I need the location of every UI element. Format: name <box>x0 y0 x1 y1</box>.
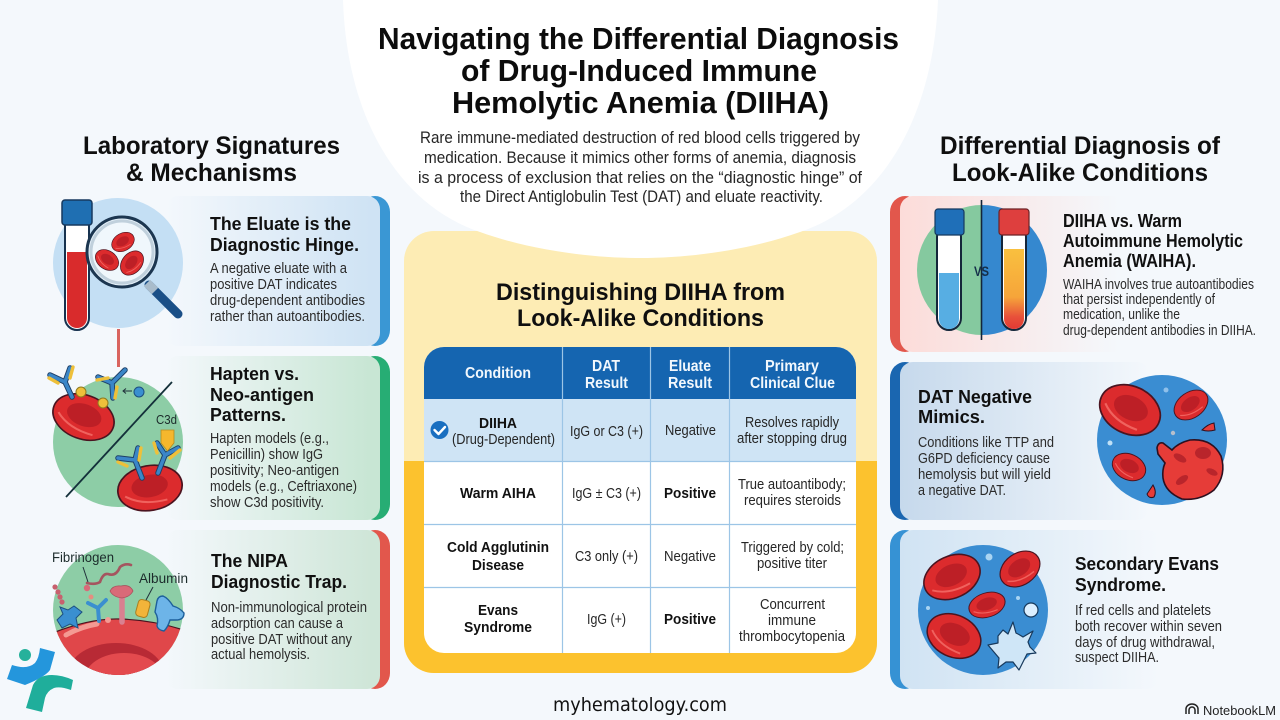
row: Cold Agglutinin Disease: positive titer <box>757 555 827 572</box>
body: NIPA <box>211 600 367 663</box>
heading: eluate: Diagnostic Hinge. <box>210 234 359 255</box>
body: NIPA: Non-immunological protein <box>211 600 367 616</box>
row: Evans Syndrome: thrombocytopenia <box>739 628 845 645</box>
icon: protein adsorption: Albumin <box>139 571 188 586</box>
right column heading <box>940 132 1221 187</box>
row: Warm AIHA: Warm AIHA <box>460 485 536 502</box>
panel: NIPA trap <box>165 530 390 689</box>
body: hapten: models (e.g., Ceftriaxone) <box>210 479 357 495</box>
icon: protein adsorption: Fibrinogen <box>52 550 114 565</box>
icon: two tubes versus <box>917 200 1047 340</box>
body: Evans: both recover within seven <box>1075 619 1222 635</box>
panel: eluate hinge <box>165 196 390 346</box>
row: Cold Agglutinin Disease <box>447 539 844 574</box>
body: WAIHA: that persist independently of <box>1063 292 1215 308</box>
heading: eluate <box>210 213 359 255</box>
table heading: Look-Alike Conditions <box>517 305 764 332</box>
panel: DAT negative mimics <box>890 362 1150 520</box>
heading: NIPA: Diagnostic Trap. <box>211 571 347 592</box>
row: Cold Agglutinin Disease: Disease <box>472 557 524 574</box>
heading: hapten: Hapten vs. <box>210 363 299 384</box>
table heading <box>496 279 785 332</box>
row: Cold Agglutinin Disease: Cold Agglutinin <box>447 539 549 556</box>
body: Evans: days of drug withdrawal, <box>1075 635 1215 651</box>
heading: mimics: DAT Negative <box>918 386 1032 407</box>
row: DIIHA: DIIHA <box>479 415 517 432</box>
table header row: Condition <box>465 365 531 382</box>
body: hapten: show C3d positivity. <box>210 495 324 511</box>
row: DIIHA: IgG or C3 (+) <box>570 423 643 440</box>
body: WAIHA <box>1063 277 1256 339</box>
body: eluate: A negative eluate with a <box>210 261 347 277</box>
heading: eluate: The Eluate is the <box>210 213 351 234</box>
intro text <box>418 129 862 206</box>
table header row <box>465 358 835 392</box>
icon: hapten and neo-antigen cells <box>46 367 186 516</box>
heading: Evans: Syndrome. <box>1075 574 1166 595</box>
row: Cold Agglutinin Disease: Triggered by cold; <box>741 539 844 556</box>
row: Evans Syndrome <box>464 596 845 645</box>
table header row: Result <box>585 375 629 392</box>
row: DIIHA: Resolves rapidly <box>745 414 839 431</box>
body: mimics: G6PD deficiency cause <box>918 451 1050 467</box>
heading: hapten: Patterns. <box>210 404 286 425</box>
panel: DIIHA vs WAIHA <box>890 196 1256 352</box>
icon: damaged red cells <box>1091 375 1227 505</box>
footer site name: myhematology.com <box>553 694 727 716</box>
title backdrop <box>343 0 938 258</box>
row: Warm AIHA: True autoantibody; <box>738 476 846 493</box>
row: Evans Syndrome: Positive <box>664 611 716 628</box>
body: eluate: drug-dependent antibodies <box>210 293 365 309</box>
table header row: Eluate <box>669 358 711 375</box>
intro text: Rare immune-mediated destruction of red blood cells triggered by <box>420 129 861 147</box>
row: Evans Syndrome: Syndrome <box>464 619 532 636</box>
heading: hapten <box>210 363 314 425</box>
row: Cold Agglutinin Disease: Negative <box>664 548 716 565</box>
table heading: Distinguishing DIIHA from <box>496 279 785 306</box>
table header row: Clinical Clue <box>750 375 835 392</box>
icon: red cells and platelet <box>917 544 1048 675</box>
icon: hapten and neo-antigen cells: C3d <box>156 413 177 427</box>
body: eluate <box>210 261 365 325</box>
logo <box>7 648 73 712</box>
heading: NIPA <box>211 550 347 592</box>
heading: WAIHA <box>1063 210 1243 271</box>
icon: protein adsorption <box>52 545 188 675</box>
heading: WAIHA: DIIHA vs. Warm <box>1063 210 1182 231</box>
panel: comparison table <box>404 231 877 673</box>
left column heading: & Mechanisms <box>126 159 297 187</box>
icon: two tubes versus: VS <box>974 264 989 279</box>
body: mimics: hemolysis but will yield <box>918 467 1051 483</box>
body: eluate: rather than autoantibodies. <box>210 309 365 325</box>
body: mimics: Conditions like TTP and <box>918 435 1054 451</box>
row: DIIHA <box>430 414 847 448</box>
row: DIIHA: Negative <box>665 422 716 439</box>
row: Warm AIHA: requires steroids <box>744 492 841 509</box>
right column heading: Differential Diagnosis of <box>940 132 1221 160</box>
connector line <box>117 329 120 367</box>
row: Cold Agglutinin Disease: C3 only (+) <box>575 548 638 565</box>
title <box>378 21 899 120</box>
body: NIPA: positive DAT without any <box>211 632 353 648</box>
title: Navigating the Differential Diagnosis <box>378 21 899 56</box>
heading: mimics: Mimics. <box>918 406 985 427</box>
intro text: medication. Because it mimics other forms of anemia, diagnosis <box>424 149 856 167</box>
body: mimics: a negative DAT. <box>918 483 1006 499</box>
body: NIPA: adsorption can cause a <box>211 616 343 632</box>
table body <box>424 347 856 653</box>
intro text: the Direct Antiglobulin Test (DAT) and eluate reactivity. <box>460 188 823 206</box>
panel: secondary Evans <box>890 530 1222 689</box>
heading: hapten: Neo-antigen <box>210 384 314 405</box>
icon: check badge <box>430 421 448 439</box>
body: hapten: Hapten models (e.g., <box>210 431 329 447</box>
title: of Drug-Induced Immune <box>461 53 817 88</box>
panel: hapten patterns <box>165 356 390 520</box>
row: DIIHA: (Drug-Dependent) <box>452 431 555 448</box>
row: DIIHA: after stopping drug <box>737 430 847 447</box>
left column heading <box>83 132 340 187</box>
table header row: Result <box>668 375 713 392</box>
body: Evans <box>1075 603 1222 666</box>
left column heading: Laboratory Signatures <box>83 132 340 160</box>
row: Evans Syndrome: Evans <box>478 602 518 619</box>
row: Evans Syndrome: IgG (+) <box>587 611 626 628</box>
row: Warm AIHA: Positive <box>664 485 716 502</box>
heading: Evans <box>1075 553 1219 595</box>
body: eluate: positive DAT indicates <box>210 277 337 293</box>
intro text: is a process of exclusion that relies on the “diagnostic hinge” of <box>418 169 862 187</box>
row: Evans Syndrome: immune <box>768 612 816 629</box>
heading: WAIHA: Anemia (WAIHA). <box>1063 250 1196 271</box>
NotebookLM mark: NotebookLM <box>1203 703 1276 718</box>
table header row: Primary <box>765 358 819 375</box>
body: Evans: suspect DIIHA. <box>1075 650 1159 666</box>
heading: NIPA: The NIPA <box>211 550 288 571</box>
body: hapten: Penicillin) show IgG <box>210 447 323 463</box>
title: Hemolytic Anemia (DIIHA) <box>452 85 829 120</box>
icon: test tube and magnifier <box>53 198 183 330</box>
row: Evans Syndrome: Concurrent <box>760 596 826 613</box>
body: Evans: If red cells and platelets <box>1075 603 1211 619</box>
body: WAIHA: medication, unlike the <box>1063 307 1180 323</box>
body: NIPA: actual hemolysis. <box>211 647 310 663</box>
row: Warm AIHA: IgG ± C3 (+) <box>572 485 641 502</box>
body: mimics <box>918 435 1054 499</box>
table header row: DAT <box>592 358 620 375</box>
heading: WAIHA: Autoimmune Hemolytic <box>1063 230 1243 251</box>
body: hapten <box>210 431 357 511</box>
heading: mimics <box>918 386 1032 427</box>
heading: Evans: Secondary Evans <box>1075 553 1219 574</box>
body: hapten: positivity; Neo-antigen <box>210 463 339 479</box>
right column heading: Look-Alike Conditions <box>952 159 1208 187</box>
row: Warm AIHA <box>460 476 846 509</box>
